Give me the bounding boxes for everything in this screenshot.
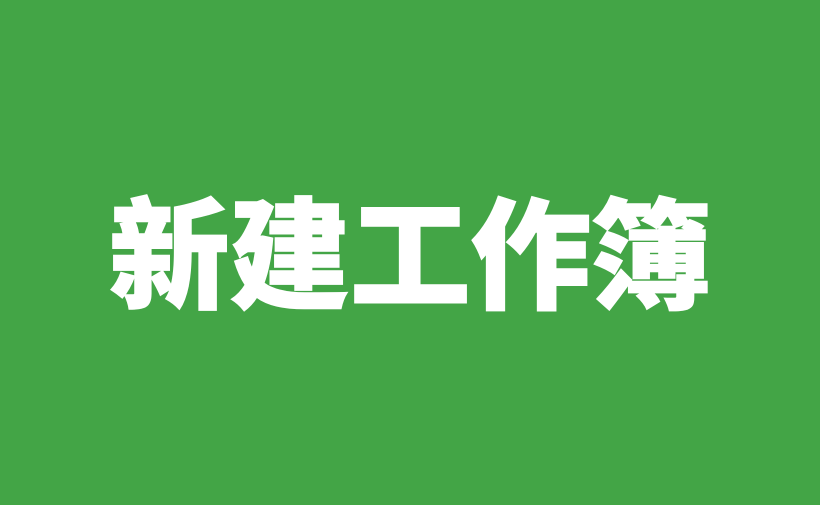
title: 新建工作簿 [109, 190, 712, 325]
